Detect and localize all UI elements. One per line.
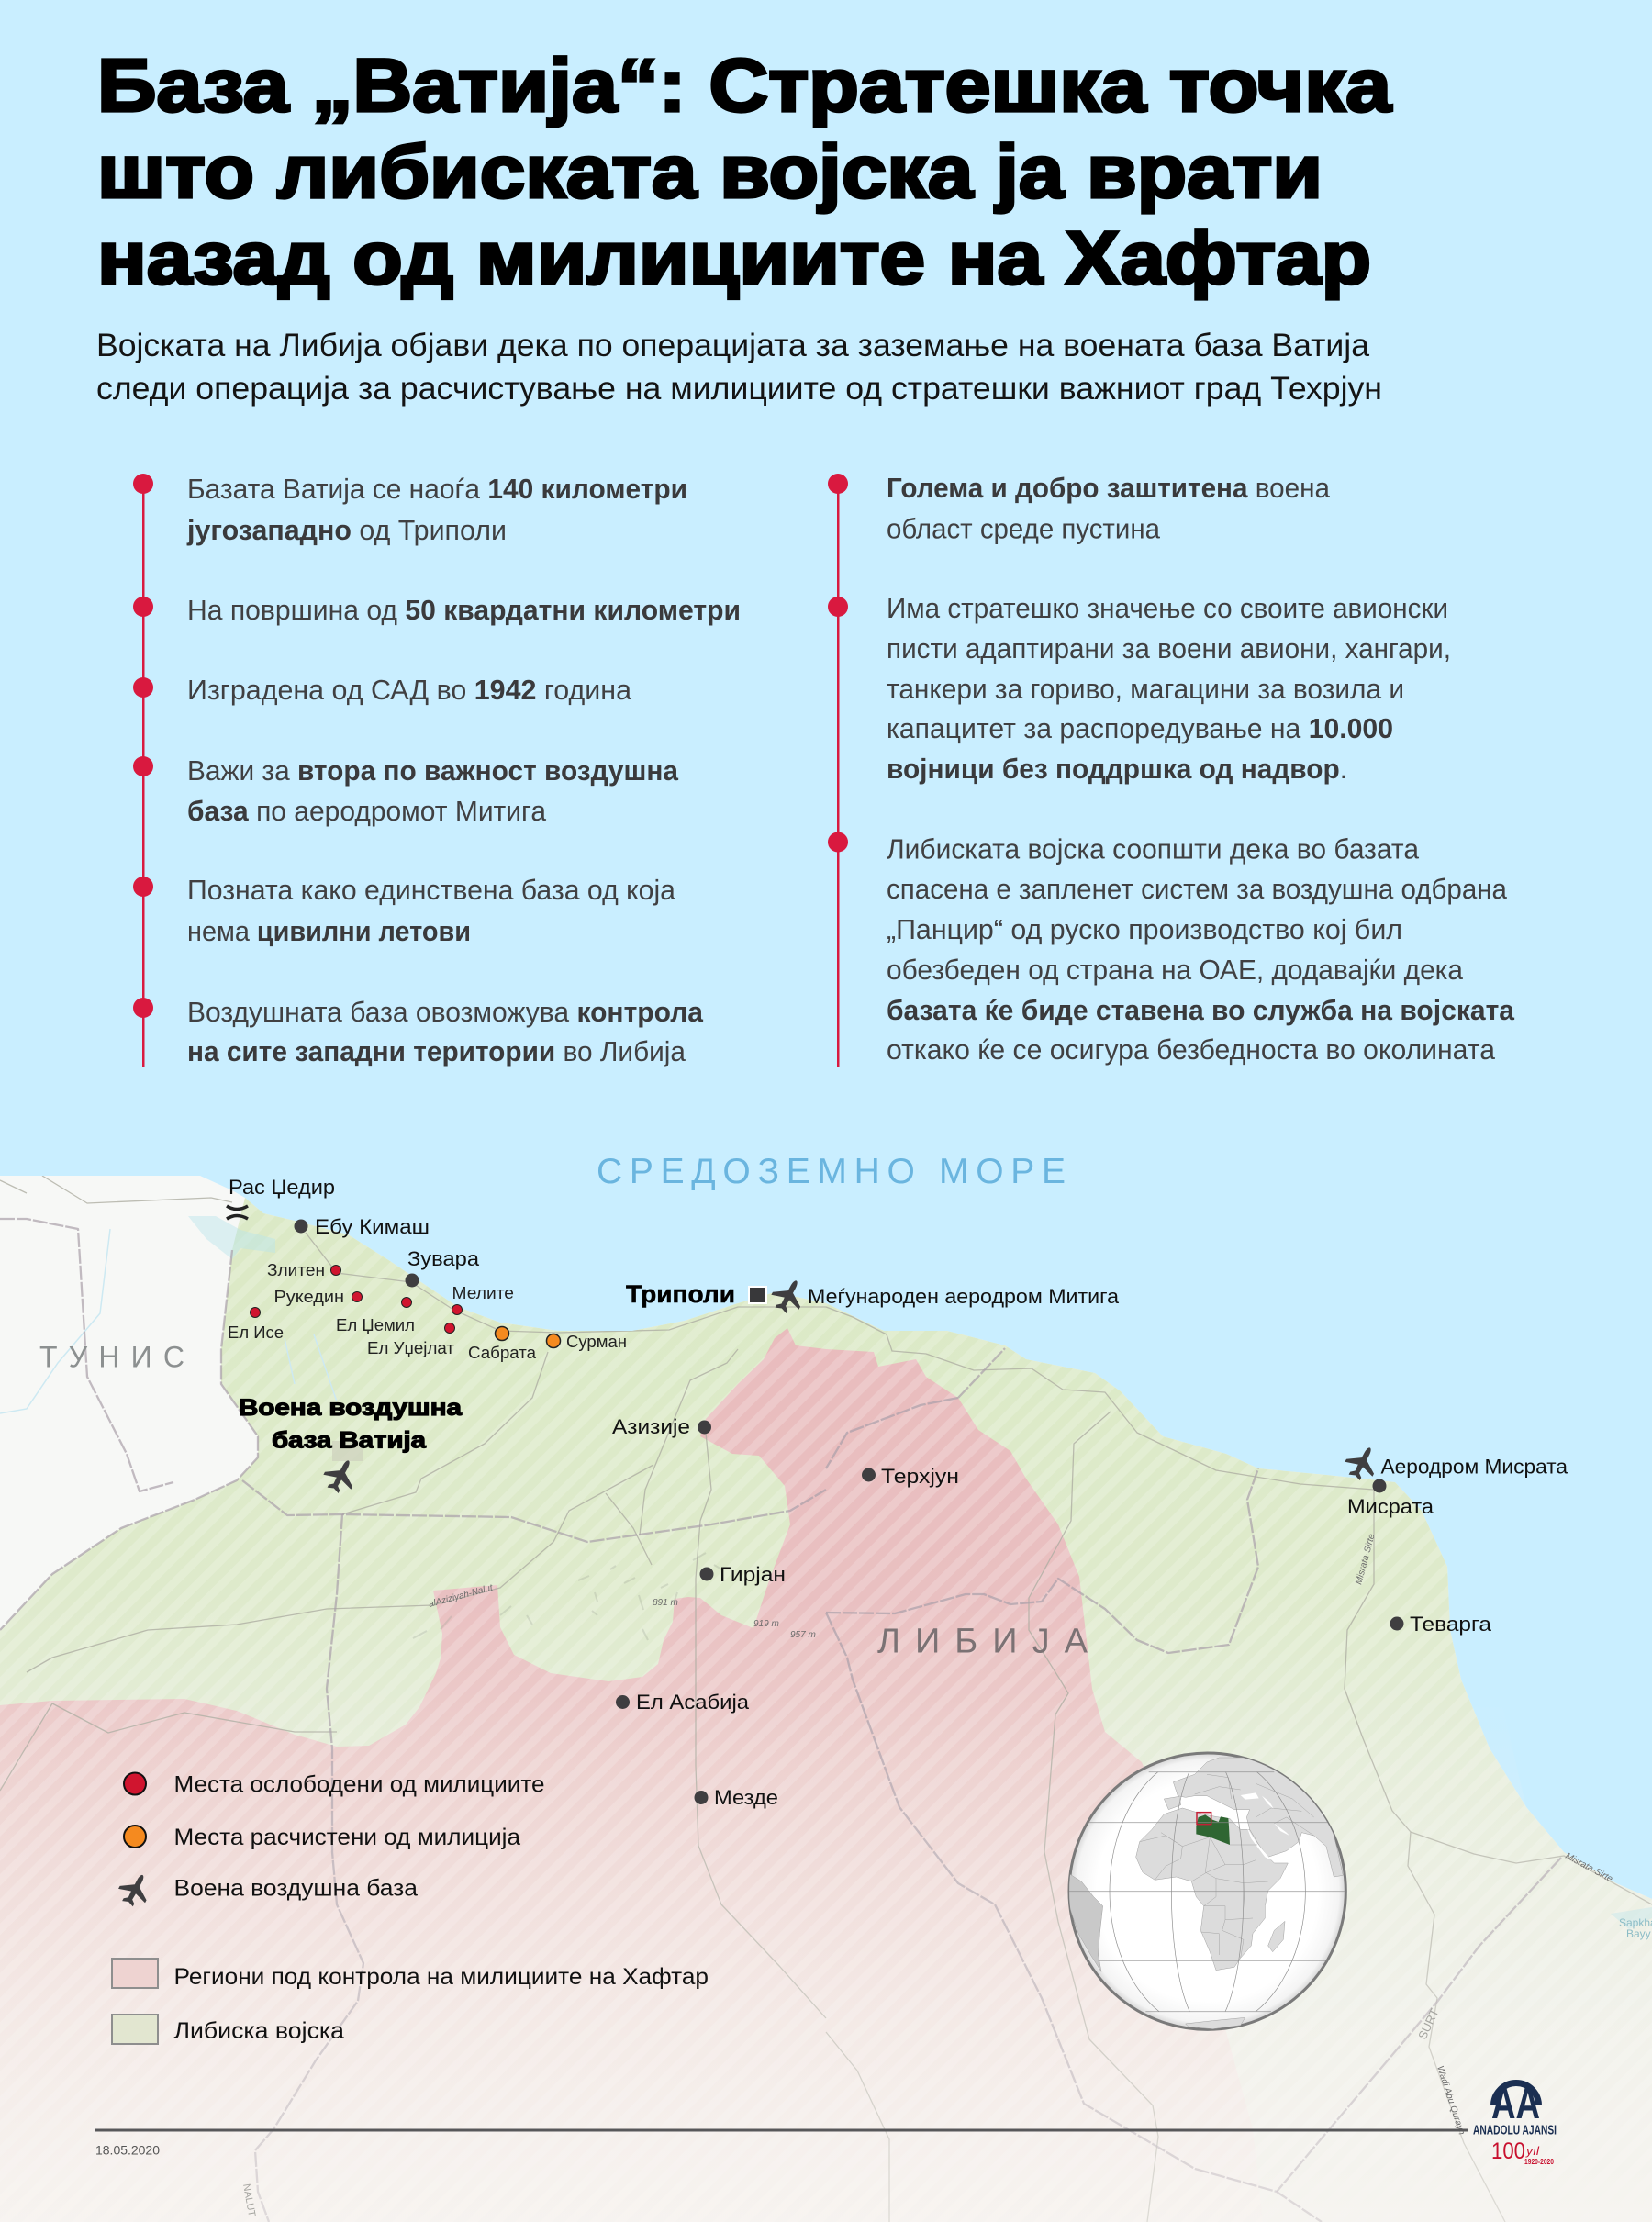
- panel: left facts timeline: На површина од 50 квардатни километри: [187, 595, 741, 626]
- globe: graticule: [1069, 1772, 1346, 2012]
- globe: country borders: [1140, 1774, 1314, 1958]
- marker: Misrata: Мисрата: [1347, 1495, 1434, 1518]
- legend: cleared places: Места расчистени од милиција: [174, 1825, 520, 1850]
- footer divider: [95, 2129, 1468, 2131]
- Anadolu Agency logo: 1920-2020: [1524, 2157, 1554, 2166]
- marker: Al Assa (liberated): Ел Исе: [228, 1323, 284, 1342]
- subtitle: следи операција за расчистување на милициите од стратешки важниот град Техрјун: [96, 371, 1382, 407]
- panel: left facts timeline: Базата Ватија се наоѓа 140 километри: [187, 474, 687, 505]
- panel: right facts timeline: „Панцир“ од руско производство кој бил: [887, 914, 1402, 945]
- globe: Antarctica: [1186, 2017, 1245, 2029]
- legend: Libyan army: [112, 2015, 344, 2044]
- legend: air base: [114, 1868, 418, 1911]
- panel: left facts timeline: Позната како единствена база од која: [187, 875, 675, 906]
- subtitle: [96, 328, 1382, 407]
- date: 18.05.2020: [95, 2142, 160, 2157]
- marker: Sabratha (cleared): Сабрата: [468, 1343, 537, 1362]
- marker: Melite (liberated): Мелите: [452, 1283, 514, 1302]
- label: Mediterranean Sea: СРЕДОЗЕМНО МОРЕ: [597, 1152, 1066, 1191]
- small map annotations: 919 m: [753, 1619, 779, 1629]
- title: назад од милициите на Хафтар: [97, 217, 1371, 300]
- panel: right facts timeline: Голема и добро заштитена воена: [887, 473, 1330, 504]
- marker: Al Jemil (liberated): [336, 1298, 415, 1334]
- legend: Haftar regions: Региони под контрола на милициите на Хафтар: [174, 1964, 709, 1990]
- marker: Tarhuna: Терхјун: [881, 1465, 959, 1488]
- marker: Zliten (liberated): Злитен: [267, 1260, 325, 1279]
- panel: left facts timeline: Важи за втора по важност воздушна: [187, 755, 679, 787]
- icon: plane at Mitiga: [767, 1274, 810, 1318]
- Anadolu Agency logo: AA: [1491, 2080, 1540, 2128]
- small map annotations: Bayy: [1626, 1927, 1651, 1940]
- map: road network: [0, 1176, 1652, 2222]
- panel: left facts timeline: Воздушната база овозможува контрола: [187, 997, 704, 1028]
- globe: Eurasia: [1164, 1758, 1343, 1877]
- marker: Abu Kammash: Ебу Кимаш: [315, 1215, 430, 1238]
- panel: right facts timeline: танкери за гориво, магацини за возила и: [887, 674, 1404, 705]
- marker: Zuwara: Зувара: [407, 1247, 480, 1270]
- subtitle: Војската на Либија објави дека по операцијата за заземање на воената база Ватија: [96, 328, 1370, 363]
- label: Watiya air base: Воена воздушна: [239, 1395, 463, 1421]
- Anadolu Agency logo: 100: [1491, 2138, 1525, 2164]
- label: Watiya air base: [239, 1395, 463, 1454]
- marker: Al Asabah: Ел Асабија: [636, 1691, 750, 1714]
- panel: left facts timeline: [133, 474, 741, 1067]
- label: Ras Ajdir: Рас Џедир: [229, 1176, 335, 1199]
- panel: right facts timeline: писти адаптирани за воени авиони, хангари,: [887, 633, 1451, 664]
- globe: locator box: [1197, 1813, 1211, 1825]
- marker: Al Ujaylat (liberated): Ел Уџејлат: [367, 1338, 455, 1357]
- panel: left facts timeline: на сите западни територии во Либија: [187, 1036, 686, 1067]
- marker: Rukedin (liberated): Рукедин: [273, 1287, 344, 1306]
- globe inset: [1069, 1753, 1346, 2029]
- panel: right facts timeline: обезбеден од страна на ОАЕ, додавајќи дека: [887, 955, 1463, 986]
- icon: Ras Ajdir border crossing: [227, 1206, 248, 1219]
- marker: Aziziya: Азизије: [612, 1415, 690, 1438]
- panel: right facts timeline: Либиската војска соопшти дека во базата: [887, 833, 1419, 865]
- icon: Watiya base footprint: [332, 1441, 363, 1461]
- label: Libya: ЛИБИЈА: [877, 1623, 1088, 1661]
- globe: Libya: [1196, 1814, 1230, 1845]
- small map annotations: SURT: [1415, 2006, 1442, 2041]
- Anadolu Agency logo: ANADOLU AJANSI: [1473, 2122, 1557, 2138]
- marker: Zuwara: [406, 1247, 480, 1287]
- icon: plane at Watiya: [319, 1454, 363, 1498]
- legend: [112, 1771, 709, 2044]
- label: Misrata airport: Аеродром Мисрата: [1380, 1456, 1568, 1478]
- globe: Africa: [1136, 1808, 1288, 1971]
- marker: Al Ujaylat (liberated): [367, 1323, 455, 1357]
- panel: right facts timeline: спасена е запленет систем за воздушна одбрана: [887, 874, 1507, 905]
- small map annotations: Misrata-Sirte: [1564, 1851, 1614, 1884]
- Anadolu Agency logo: [1473, 2080, 1557, 2166]
- panel: right facts timeline: откако ќе се осигура безбедноста во околината: [887, 1034, 1495, 1066]
- icon: plane at Misrata: [1341, 1441, 1384, 1485]
- marker: Tripoli: Триполи: [626, 1280, 735, 1308]
- small map annotations: [240, 1533, 1652, 2217]
- label: Tunisia: ТУНИС: [39, 1340, 184, 1373]
- map: land base: [0, 1176, 1652, 2222]
- marker: Al Assa (liberated): [228, 1307, 284, 1342]
- map: diagonal hatching: [0, 1198, 1652, 2222]
- title: База „Ватија“: Стратешка точка: [97, 44, 1393, 128]
- marker: Mizda: Мезде: [714, 1786, 778, 1809]
- title: [97, 44, 1393, 300]
- globe: Madagascar: [1268, 1921, 1285, 1952]
- panel: right facts timeline: капацитет за распоредување на 10.000: [887, 713, 1393, 744]
- panel: right facts timeline: базата ќе биде ставена во служба на војската: [887, 995, 1515, 1026]
- panel: left facts timeline: Изградена од САД во 1942 година: [187, 675, 631, 706]
- small map annotations: 891 m: [653, 1598, 678, 1608]
- panel: right facts timeline: војници без поддршка од надвор.: [887, 754, 1347, 785]
- panel: right facts timeline: Има стратешко значење со своите авионски: [887, 593, 1448, 624]
- small map annotations: 957 m: [790, 1630, 816, 1640]
- marker: Al Jemil (liberated): Ел Џемил: [336, 1315, 415, 1334]
- small map annotations: alAziziyah-Nalut: [428, 1582, 495, 1610]
- legend: Libyan army: Либиска војска: [174, 2018, 344, 2044]
- marker: Melite (liberated): [452, 1283, 514, 1314]
- panel: right facts timeline: [828, 473, 1515, 1067]
- small map annotations: NALUT: [240, 2183, 257, 2217]
- title: што либиската војска ја врати: [97, 130, 1323, 214]
- panel: left facts timeline: база по аеродромот Митига: [187, 796, 546, 827]
- label: Mitiga airport: Меѓународен аеродром Митига: [808, 1285, 1120, 1308]
- label: Watiya air base: база Ватија: [272, 1428, 427, 1454]
- globe: inland seas: [1241, 1792, 1289, 1860]
- globe: South America: [1069, 1874, 1103, 1971]
- map: Haftar militia region (red): [0, 1328, 1263, 2222]
- map: mountain terrain texture: [413, 1553, 723, 1640]
- panel: right facts timeline: област среде пустина: [887, 514, 1160, 545]
- small map annotations: Wadi Abu Qurayn: [1434, 2065, 1467, 2137]
- marker: Tawergha: Теварга: [1410, 1613, 1492, 1636]
- small map annotations: Misrata-Sirte: [1354, 1533, 1378, 1586]
- legend: liberated places: Места ослободени од милициите: [174, 1771, 545, 1797]
- map: southern fade: [0, 1698, 1652, 2222]
- marker: Gharyan: [699, 1563, 786, 1586]
- map: Libyan army region (green): [0, 1198, 1652, 2222]
- map: lagoons and rivers: [0, 1216, 1652, 1929]
- Anadolu Agency logo: yıl: [1525, 2144, 1540, 2158]
- legend: air base: Воена воздушна база: [174, 1876, 418, 1902]
- marker: Sabratha (cleared): [468, 1327, 537, 1362]
- marker: Gharyan: Гирјан: [720, 1563, 786, 1586]
- logo: arc: [1494, 2083, 1538, 2105]
- marker: Surman (cleared): Сурман: [566, 1332, 627, 1351]
- globe: meridians: [1109, 1771, 1306, 2012]
- panel: left facts timeline: нема цивилни летови: [187, 916, 471, 947]
- marker: Misrata: [1347, 1479, 1434, 1518]
- panel: left facts timeline: југозападно од Триполи: [186, 515, 507, 546]
